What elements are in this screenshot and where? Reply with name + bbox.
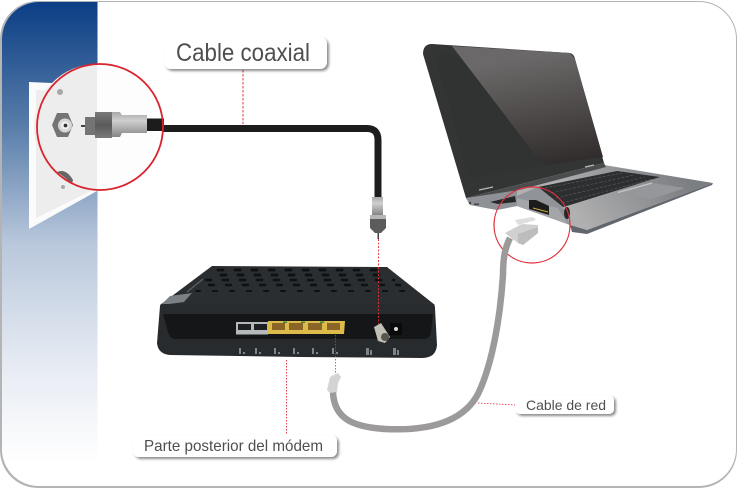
laptop base bbox=[466, 165, 713, 230]
side port bbox=[490, 196, 516, 204]
coaxial cable bbox=[150, 128, 378, 198]
modem sticker bbox=[162, 293, 192, 305]
icon: modem coax port bbox=[374, 323, 390, 343]
modem logo strip bbox=[187, 279, 203, 292]
modem top bbox=[160, 266, 435, 305]
icon: lower screw bbox=[61, 185, 65, 189]
icon: wall socket bbox=[52, 113, 73, 137]
modem rear recess bbox=[163, 314, 433, 339]
left edge bbox=[466, 186, 517, 210]
small ports bbox=[469, 202, 479, 205]
leader line: coax port bbox=[378, 239, 380, 324]
touchpad top strip bbox=[618, 183, 652, 192]
hinge band bbox=[466, 163, 606, 198]
connector: coaxial plug at wall bbox=[81, 112, 164, 138]
callout ring bbox=[37, 64, 163, 190]
callout circle: laptop port bbox=[494, 187, 570, 263]
label: Cable de red: Cable de red bbox=[526, 397, 606, 413]
callout circle: wall outlet bbox=[34, 64, 163, 190]
leader line: network cable bbox=[478, 403, 515, 405]
touchpad bbox=[618, 183, 685, 199]
port marks bbox=[239, 348, 399, 355]
icon: lower socket bbox=[57, 171, 73, 184]
icon: network port bbox=[529, 200, 549, 215]
laptop bbox=[423, 44, 713, 234]
modem bbox=[157, 266, 437, 358]
icon: power socket bbox=[390, 323, 402, 335]
leader line: yellow ports bbox=[334, 335, 336, 373]
leader line: coaxial cable bbox=[242, 70, 244, 124]
keyboard bbox=[538, 171, 660, 207]
connector: coaxial plug to modem bbox=[370, 197, 386, 239]
keys bbox=[545, 173, 652, 203]
base edge bbox=[570, 183, 713, 234]
leader line: modem rear bbox=[286, 360, 288, 435]
hinges bbox=[479, 187, 493, 190]
wall plate bbox=[29, 82, 97, 229]
network cable bbox=[333, 238, 510, 429]
laptop lid bbox=[423, 44, 604, 198]
modem front bbox=[157, 304, 437, 358]
icon: upper screw bbox=[57, 89, 63, 95]
label: Parte posterior del módem: Parte posterior del módem bbox=[144, 438, 323, 455]
label: Cable coaxial: Cable coaxial bbox=[176, 39, 310, 67]
gray ports bbox=[236, 322, 268, 334]
label: Cable de red bbox=[515, 395, 614, 414]
screen reflection bbox=[452, 46, 603, 165]
connector: RJ45 at laptop bbox=[505, 217, 538, 245]
panel: blue wall bbox=[2, 2, 98, 486]
connector: RJ45 at modem bbox=[327, 373, 341, 393]
modem vents bbox=[196, 270, 404, 291]
laptop screen bbox=[435, 55, 602, 178]
yellow ports bbox=[268, 321, 345, 334]
